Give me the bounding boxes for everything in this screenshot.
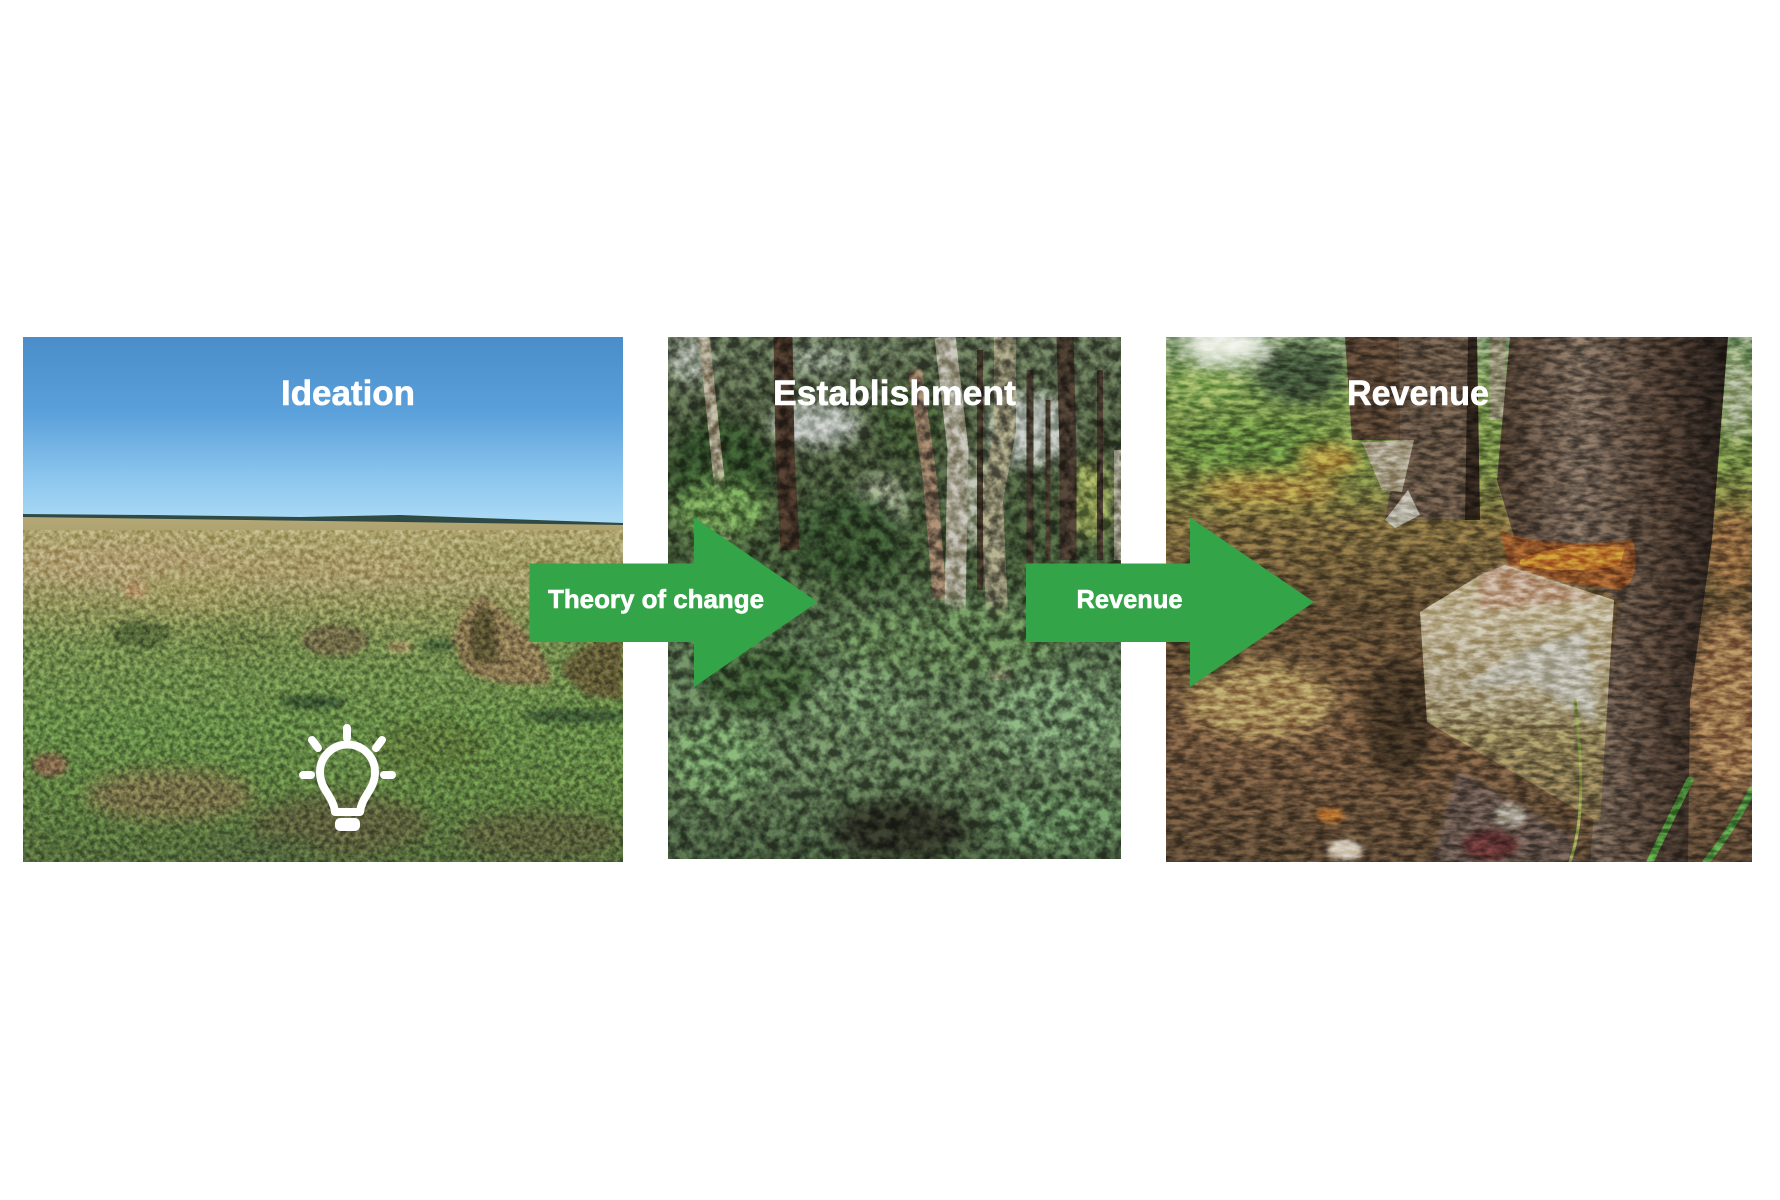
soil and shadow patches (85, 626, 625, 864)
grass blades (1570, 700, 1752, 862)
panel: ideation photo (20, 337, 627, 864)
horizon treeline (23, 514, 623, 525)
bright sky and background light (1169, 327, 1766, 790)
grass tussocks (32, 581, 627, 777)
orange resin wound (1500, 530, 1636, 590)
sky gaps in canopy (670, 338, 1114, 546)
arrow label: revenue: Revenue (1076, 584, 1182, 614)
understory leaves (670, 480, 1130, 850)
forest floor backdrop (1166, 337, 1752, 862)
foliage texture (668, 337, 1121, 859)
resin-stained tree base (1316, 770, 1575, 862)
icon: lightbulb (303, 728, 392, 829)
forest backdrop (668, 337, 1121, 859)
panel: revenue photo (1166, 327, 1766, 862)
panel: establishment photo (668, 337, 1130, 860)
heading: revenue: Revenue (1347, 374, 1489, 413)
dark foliage (668, 380, 970, 860)
sky (23, 337, 623, 527)
main tree trunk (1497, 337, 1728, 862)
resin bag (1420, 565, 1614, 823)
arrow label: theory of change: Theory of change (548, 584, 764, 614)
background tree trunks (1345, 337, 1505, 520)
grassland ground (23, 515, 623, 862)
infographic canvas (23, 337, 1752, 862)
dry grass band (44, 550, 591, 610)
tree trunks (704, 337, 1118, 680)
heading: establishment: Establishment (773, 374, 1016, 413)
arrow: theory of change (530, 518, 818, 687)
heading: ideation: Ideation (281, 374, 415, 413)
pine needle and bark texture (1166, 337, 1752, 862)
background resin bag (1362, 440, 1420, 528)
texture overlay (23, 530, 623, 862)
arrow: revenue (1026, 518, 1314, 687)
